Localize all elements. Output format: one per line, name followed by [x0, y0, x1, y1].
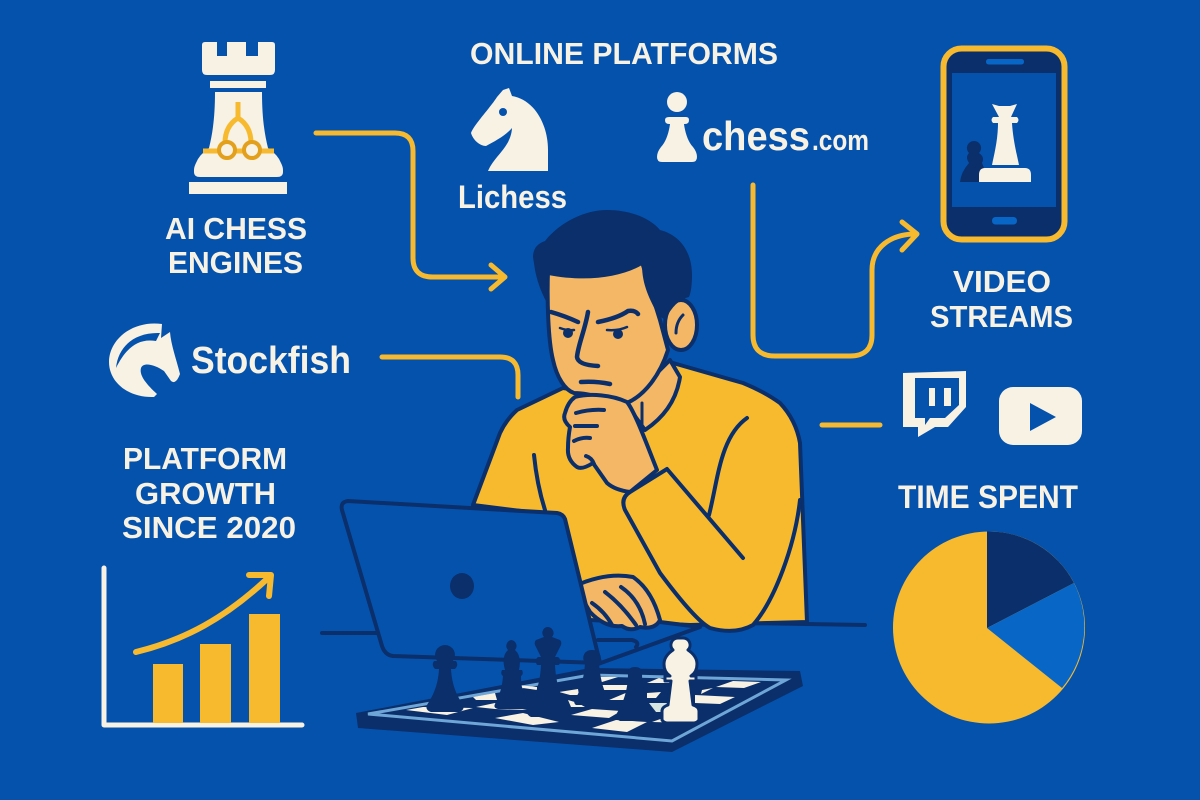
forearm sleeve outline	[623, 469, 800, 631]
icon: rook with AI circuit	[189, 42, 287, 194]
chess pieces: white bishop	[662, 638, 699, 723]
label: Lichess: Lichess	[458, 179, 567, 215]
heading: AI chess engines	[165, 211, 307, 280]
laptop base	[575, 622, 700, 664]
label: chess.com: chess.com	[702, 113, 869, 159]
arrow: chess.com to video streams	[753, 185, 917, 356]
logo dot	[450, 573, 474, 599]
hand on chin	[564, 395, 657, 492]
icon: Twitch	[903, 371, 966, 437]
heading: video streams: VIDEO	[953, 264, 1051, 299]
heading: video streams	[930, 264, 1073, 334]
person: thinking chess player	[322, 210, 865, 633]
face	[548, 262, 668, 403]
heading: platform growth since 2020: SINCE 2020	[122, 510, 296, 545]
icon: YouTube	[999, 387, 1082, 445]
icon: smartphone	[944, 48, 1064, 240]
heading: online platforms: ONLINE PLATFORMS	[470, 36, 778, 71]
chessboard	[356, 668, 803, 752]
laptop	[342, 501, 700, 664]
sweater body	[473, 363, 807, 625]
neck	[627, 360, 680, 430]
pie chart: time spent	[893, 531, 1085, 724]
heading: AI chess engines: ENGINES	[168, 245, 303, 280]
laptop lid	[342, 501, 600, 663]
heading: platform growth since 2020: PLATFORM	[123, 441, 287, 476]
ear	[665, 300, 697, 350]
chess pieces: dark king	[527, 627, 569, 717]
heading: platform growth since 2020: GROWTH	[135, 476, 276, 511]
heading: video streams: STREAMS	[930, 299, 1073, 334]
hand on keyboard	[575, 576, 660, 629]
icon: Lichess knight	[471, 88, 548, 171]
brows and nose	[551, 311, 638, 384]
arrow: AI engines to player	[316, 133, 505, 289]
chess pieces: dark piece right	[616, 667, 654, 721]
chess pieces: dark bishop	[494, 640, 528, 709]
bar chart: platform growth	[104, 568, 302, 725]
table edge	[322, 622, 865, 633]
heading: platform growth since 2020	[122, 441, 296, 545]
connector: player to streaming logos	[822, 422, 880, 428]
icon: chess.com pawn	[657, 92, 697, 162]
hair	[533, 210, 692, 320]
chess pieces: dark pawn	[426, 645, 464, 712]
label: Stockfish: Stockfish	[191, 340, 351, 382]
forearm sleeve fill	[622, 469, 800, 631]
chess pieces: dark piece centre	[574, 650, 610, 705]
body creases	[534, 418, 747, 515]
logo: Stockfish horse	[109, 323, 180, 397]
heading: time spent: TIME SPENT	[898, 479, 1078, 515]
connector: Stockfish to player	[382, 357, 518, 397]
heading: AI chess engines: AI CHESS	[165, 211, 307, 246]
